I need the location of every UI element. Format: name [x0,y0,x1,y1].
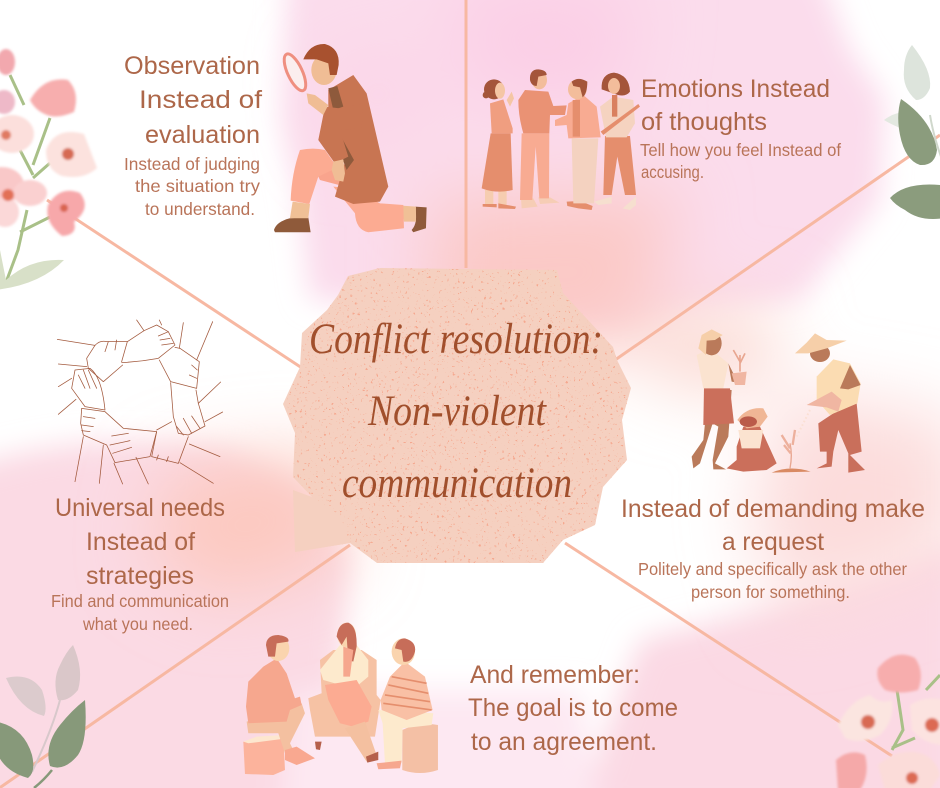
panel: observation text [124,52,262,219]
panel: universal needs text: strategies [86,562,194,590]
central heading shape [280,260,640,570]
illustration: three people seated in conversation [243,623,438,775]
panel: observation text: Instead of judging [124,154,260,174]
panel: universal needs text: Instead of [86,528,195,556]
flowers: top left [0,49,97,290]
panel: request text: Politely and specifically ask the other [638,559,907,579]
panel: request text: person for something. [691,582,850,602]
panel: observation text: Observation [124,52,260,80]
panel: request text [621,495,925,602]
panel: request text: Instead of demanding make [621,495,925,523]
panel: emotions text [640,75,841,182]
leaves: bottom left [0,645,86,788]
panel: request text: a request [722,528,824,556]
panel: closing reminder text: The goal is to come [468,694,678,722]
panel: universal needs text: what you need. [82,614,193,634]
title: Non-violent [367,388,547,435]
panel: closing reminder text: to an agreement. [471,728,657,756]
leaves: top right [884,45,940,219]
title [309,316,603,507]
panel: universal needs text [51,494,229,634]
icon: circle of joined hands [57,320,223,484]
panel: closing reminder text [468,661,678,756]
panel: observation text: evaluation [145,121,260,149]
illustration: gardeners planting [692,329,865,473]
panel: emotions text: accusing. [641,162,704,182]
panel: emotions text: of thoughts [641,108,767,136]
illustration: detective with magnifying glass [274,44,427,232]
panel: observation text: to understand. [145,199,255,219]
panel: universal needs text: Find and communication [51,591,229,611]
panel: emotions text: Emotions Instead [641,75,830,103]
panel: closing reminder text: And remember: [470,661,640,689]
panel: observation text: the situation try [135,176,260,196]
panel: emotions text: Tell how you feel Instead of [640,140,841,160]
panel: universal needs text: Universal needs [55,494,225,522]
title: communication [342,460,572,507]
title: Conflict resolution: [309,316,603,363]
flowers: bottom right [836,655,940,788]
illustration: four people talking [482,69,640,210]
panel: observation text: Instead of [139,86,262,114]
